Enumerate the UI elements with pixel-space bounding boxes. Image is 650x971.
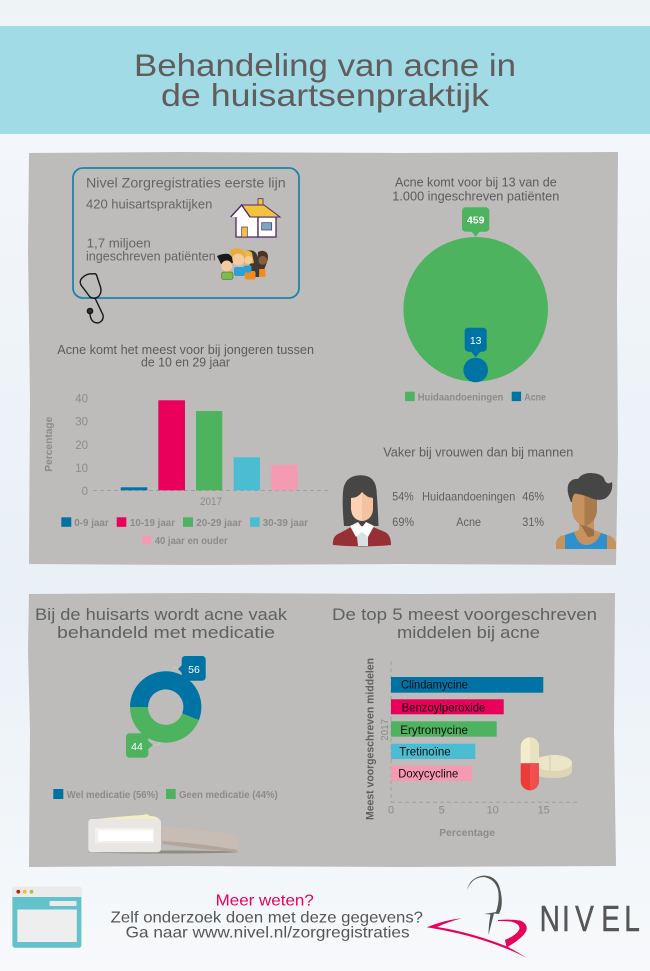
icon: group of patients xyxy=(217,248,268,280)
donut chart: medication xyxy=(126,656,206,758)
bar chart: top 5 medication: 0 xyxy=(388,804,394,816)
bar chart: top 5 medication: Erytromycine xyxy=(400,723,468,737)
table: gender percentages: Acne xyxy=(456,515,481,529)
title banner: Behandeling van acne in xyxy=(134,47,516,83)
bar chart: top 5 medication: 10 xyxy=(487,804,499,816)
table: gender percentages: 69% xyxy=(392,515,414,529)
bar chart: age groups: 20 xyxy=(75,440,88,452)
heading: top 5: De top 5 meest voorgeschreven xyxy=(332,605,597,624)
icon: woman xyxy=(333,475,391,546)
panel: treatment xyxy=(28,593,616,867)
bar chart: top 5 medication: 2017 xyxy=(379,719,391,741)
title banner xyxy=(0,26,650,134)
legend: bubble chart xyxy=(405,392,546,404)
table: gender percentages: Huidaandoeningen xyxy=(422,490,515,504)
icon: cream jar xyxy=(88,814,238,854)
heading: top 5 xyxy=(332,605,597,642)
heading: top 5: middelen bij acne xyxy=(397,623,540,642)
bubble chart: skin conditions and acne: 13 xyxy=(470,335,482,347)
legend: age groups: 10-19 jaar xyxy=(130,518,175,529)
legend: age groups xyxy=(61,517,308,547)
table: gender percentages: 54% xyxy=(392,490,414,504)
heading: prevalence xyxy=(392,175,559,204)
legend: medication: Geen medicatie (44%) xyxy=(179,790,278,801)
bar chart: age groups: 2017 xyxy=(200,496,222,508)
donut chart: medication: 56 xyxy=(188,664,200,676)
bar chart: top 5 medication: 15 xyxy=(538,804,550,816)
legend: age groups: 20-29 jaar xyxy=(196,518,242,529)
heading: age distribution: Acne komt het meest voor bij jongeren tussen xyxy=(57,342,314,357)
bar chart: age groups: 30 xyxy=(75,416,88,428)
legend: bubble chart: Acne xyxy=(524,392,546,404)
info box: Nivel Zorgregistraties: Nivel Zorgregistraties eerste lijn xyxy=(86,174,286,190)
heading: medication: Bij de huisarts wordt acne vaak xyxy=(35,605,288,624)
table: gender percentages xyxy=(392,490,544,529)
info box: Nivel Zorgregistraties: 1,7 miljoen xyxy=(87,236,151,250)
bar chart: top 5 medication: Doxycycline xyxy=(398,766,459,780)
table: gender percentages: 31% xyxy=(522,515,544,529)
heading: prevalence: Acne komt voor bij 13 van de xyxy=(395,175,557,190)
heading: medication: behandeld met medicatie xyxy=(57,623,275,642)
icon: man xyxy=(556,473,616,549)
legend: bubble chart: Huidaandoeningen xyxy=(418,392,503,404)
bar chart: top 5 medication: Benzoylperoxide xyxy=(402,700,486,714)
info box: Nivel Zorgregistraties: 420 huisartspraktijken xyxy=(86,197,212,211)
call to action text xyxy=(111,893,423,942)
legend: medication xyxy=(53,789,278,801)
table: gender percentages: 46% xyxy=(522,490,544,504)
legend: medication: Wel medicatie (56%) xyxy=(67,790,158,801)
bar chart: age groups: 0 xyxy=(82,486,88,498)
icon: house xyxy=(231,199,280,237)
legend: age groups: 40 jaar en ouder xyxy=(155,536,228,547)
title banner: de huisartsenpraktijk xyxy=(161,77,489,113)
call to action text: Zelf onderzoek doen met deze gegevens? xyxy=(111,909,423,926)
bubble chart: skin conditions and acne xyxy=(403,207,548,382)
logo: Nivel xyxy=(427,876,640,958)
icon: pills xyxy=(521,737,572,790)
bubble chart: skin conditions and acne: 459 xyxy=(467,214,485,226)
heading: gender: Vaker bij vrouwen dan bij mannen xyxy=(383,445,573,460)
bar chart: top 5 medication: Tretinoïne xyxy=(399,745,451,759)
info box: Nivel Zorgregistraties xyxy=(73,168,299,298)
heading: age distribution: de 10 en 29 jaar xyxy=(141,355,231,370)
bar chart: top 5 medication: 5 xyxy=(439,804,445,816)
heading: age distribution xyxy=(57,342,314,370)
bar chart: top 5 medication: Meest voorgeschreven middelen xyxy=(364,658,376,820)
bar chart: age groups xyxy=(43,394,328,508)
bar chart: top 5 medication: Clindamycine xyxy=(401,677,468,691)
info box: Nivel Zorgregistraties: ingeschreven patiënten xyxy=(86,250,216,264)
donut chart: medication: 44 xyxy=(131,741,143,753)
legend: age groups: 30-39 jaar xyxy=(263,518,308,529)
legend: age groups: 0-9 jaar xyxy=(74,518,109,529)
bar chart: top 5 medication: Percentage xyxy=(439,827,495,839)
bar chart: age groups: Percentage xyxy=(43,417,55,472)
heading: medication xyxy=(35,605,288,642)
icon: browser window xyxy=(12,886,81,948)
call to action text: Meer weten? xyxy=(216,893,314,910)
call to action text: Ga naar www.nivel.nl/zorgregistraties xyxy=(126,925,410,942)
bar chart: age groups: 40 xyxy=(75,394,88,406)
icon: stethoscope xyxy=(80,274,103,323)
heading: prevalence: 1.000 ingeschreven patiënten xyxy=(392,189,559,204)
bar chart: top 5 medication xyxy=(364,658,577,839)
panel: acne prevalence xyxy=(28,152,618,565)
logo: Nivel: NIVEL xyxy=(540,899,640,939)
bar chart: age groups: 10 xyxy=(75,463,88,475)
